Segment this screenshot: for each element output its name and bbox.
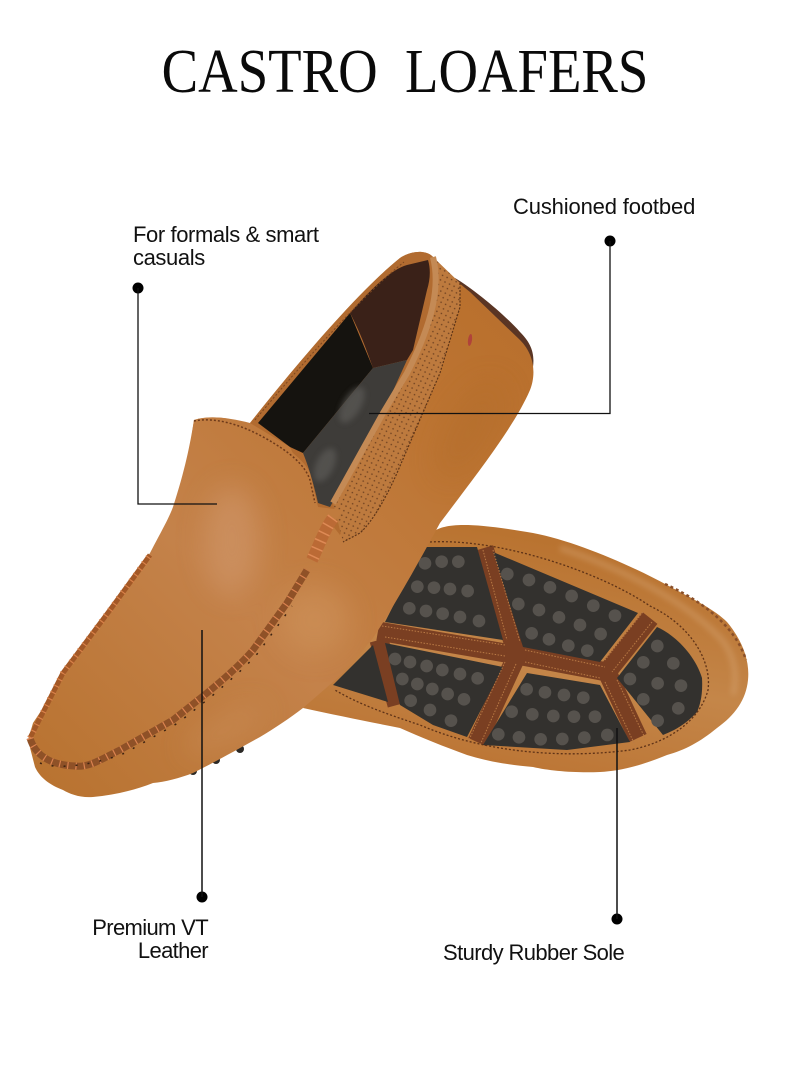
rubber studs [389,555,687,746]
label: sole: Sturdy Rubber Sole [443,940,624,965]
opening: collar rim [250,252,435,535]
upper [28,252,533,797]
shoe: main loafer [28,252,533,797]
leather highlights [201,486,342,734]
illustration: pair of loafers with callout lines [26,236,748,924]
label: leather [92,915,208,963]
callout: sole line [612,728,622,924]
label: formals: casuals [133,245,205,270]
opening: brown lining [350,260,430,368]
label: formals: For formals & smart [133,222,319,247]
sole edge stitching [335,542,708,754]
rib stitching [382,550,652,745]
perforated side band [333,257,460,542]
driving studs under toe [189,745,244,775]
sole welt highlight [560,548,735,695]
shoe: sole view [303,525,748,772]
label: leather: Leather [138,938,208,963]
callout: leather line [196,630,208,902]
band piping [333,257,436,503]
opening: footbed [303,360,407,507]
heel tab [455,278,533,367]
moccasin seam: left [30,555,150,738]
band stitch line [343,283,460,542]
sole ribs [378,548,650,742]
title: CASTRO LOAFERS [162,38,648,106]
toe stitching peeking past sole [665,584,746,660]
label: formals [133,222,319,270]
rubber panels [333,547,702,750]
vamp topline stitch [194,420,315,503]
sole welt [303,525,748,772]
callout: formals line [132,282,217,504]
callout: footbed line [369,236,616,414]
opening: black wall [258,313,373,453]
collar stitch [255,262,404,420]
red marker [467,334,473,346]
vamp [170,417,343,600]
footbed contours [309,383,370,485]
gusset ladder stitching [312,518,333,560]
moccasin seam: front [30,570,307,766]
label: leather: Premium VT [92,915,208,940]
label: footbed: Cushioned footbed [513,194,695,219]
